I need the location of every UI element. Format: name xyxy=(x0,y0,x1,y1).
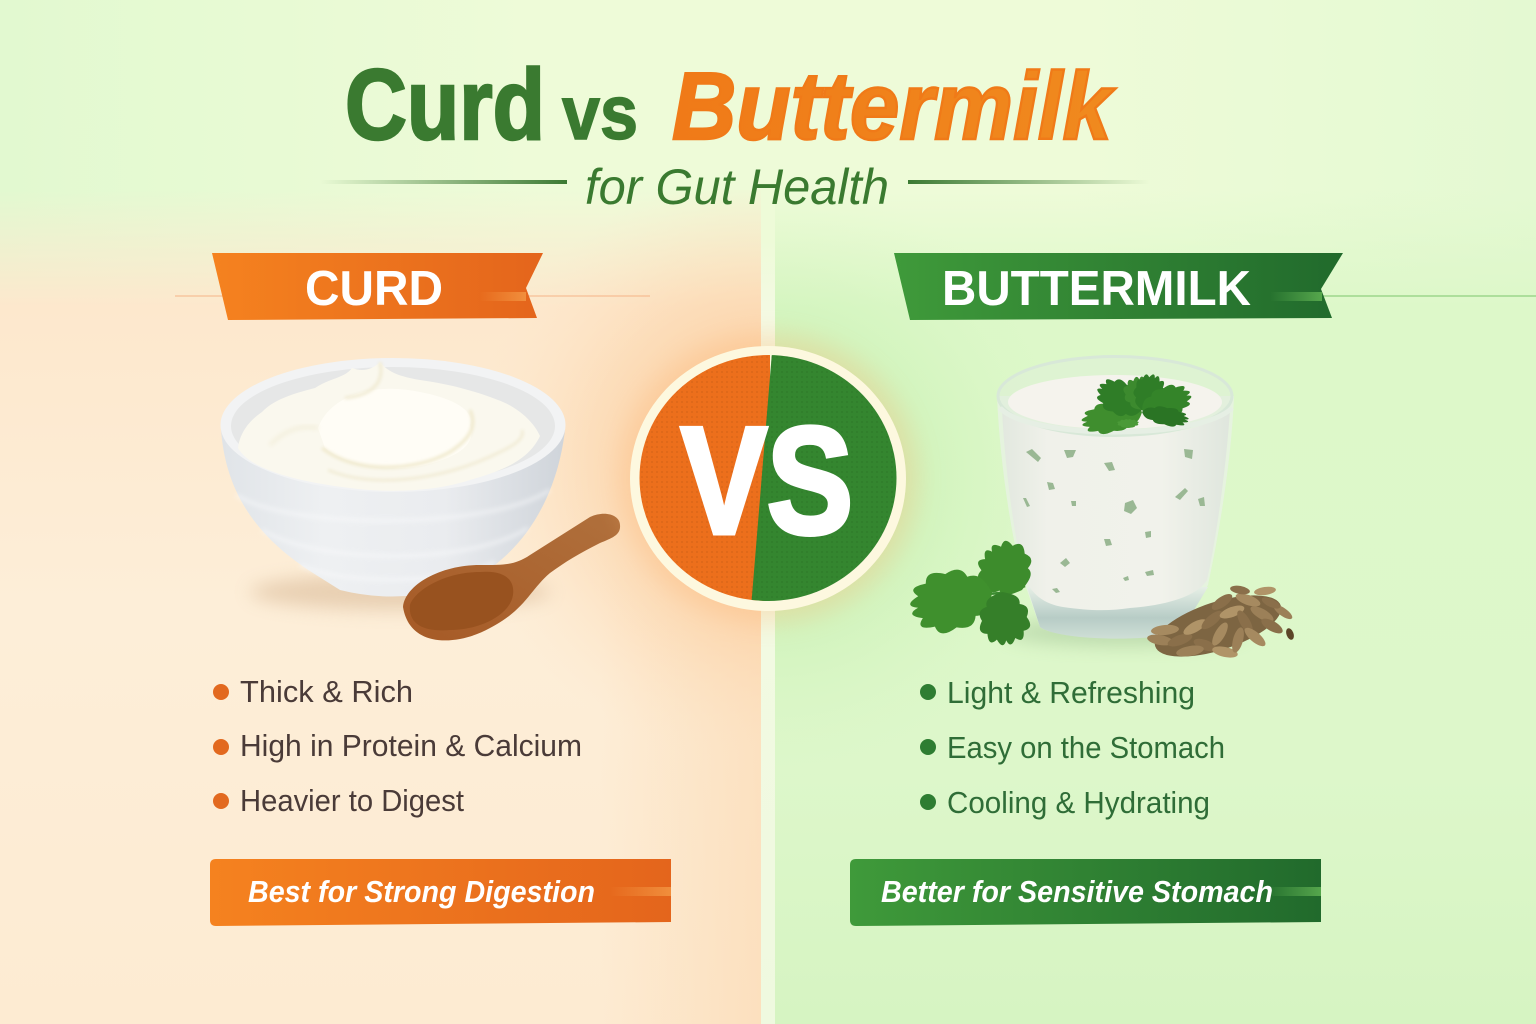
panel: buttermilk background xyxy=(775,227,1536,1024)
curd bullet list xyxy=(213,674,582,818)
buttermilk bullet list: Light & Refreshing xyxy=(947,675,1195,710)
callout: curd: Best for Strong Digestion xyxy=(248,874,595,909)
title: vs xyxy=(562,71,638,156)
illustration: glass of buttermilk with coriander and seeds xyxy=(905,356,1295,669)
bowl rim xyxy=(220,358,566,492)
glass xyxy=(997,396,1234,638)
curd xyxy=(238,362,540,491)
callout: buttermilk: Better for Sensitive Stomach xyxy=(881,874,1273,909)
bowl rings xyxy=(236,490,550,580)
buttermilk bullet list: Cooling & Hydrating xyxy=(947,785,1210,820)
milk flecks xyxy=(1023,449,1205,593)
banner: curd xyxy=(175,253,650,320)
milk xyxy=(1002,410,1230,610)
coriander sprig xyxy=(905,531,1044,647)
banner: buttermilk: BUTTERMILK xyxy=(942,262,1251,316)
illustration: bowl of curd with wooden spoon xyxy=(220,358,620,640)
buttermilk bullet list xyxy=(920,675,1225,820)
center divider xyxy=(761,240,775,1024)
buttermilk bullet list: Easy on the Stomach xyxy=(947,730,1225,765)
curd bullet list: Thick & Rich xyxy=(240,674,413,709)
title xyxy=(345,49,1116,161)
panel: curd background xyxy=(0,210,761,1024)
callout: curd xyxy=(210,859,671,926)
spoon xyxy=(403,514,620,640)
callout: buttermilk xyxy=(850,859,1321,926)
curd bullet list: Heavier to Digest xyxy=(240,783,464,818)
banner: buttermilk xyxy=(894,253,1536,320)
vs badge: VS xyxy=(681,396,853,566)
bowl body xyxy=(221,430,565,596)
title: Curd xyxy=(345,49,545,161)
curd swirl xyxy=(318,389,472,468)
subtitle: for Gut Health xyxy=(585,159,889,215)
curd bullet list: High in Protein & Calcium xyxy=(240,728,582,763)
cumin seeds xyxy=(1146,583,1295,669)
title: Buttermilk xyxy=(672,53,1116,160)
coriander on top xyxy=(1079,370,1195,438)
subtitle xyxy=(320,159,1150,215)
vs badge xyxy=(618,333,920,623)
banner: curd: CURD xyxy=(305,262,443,316)
